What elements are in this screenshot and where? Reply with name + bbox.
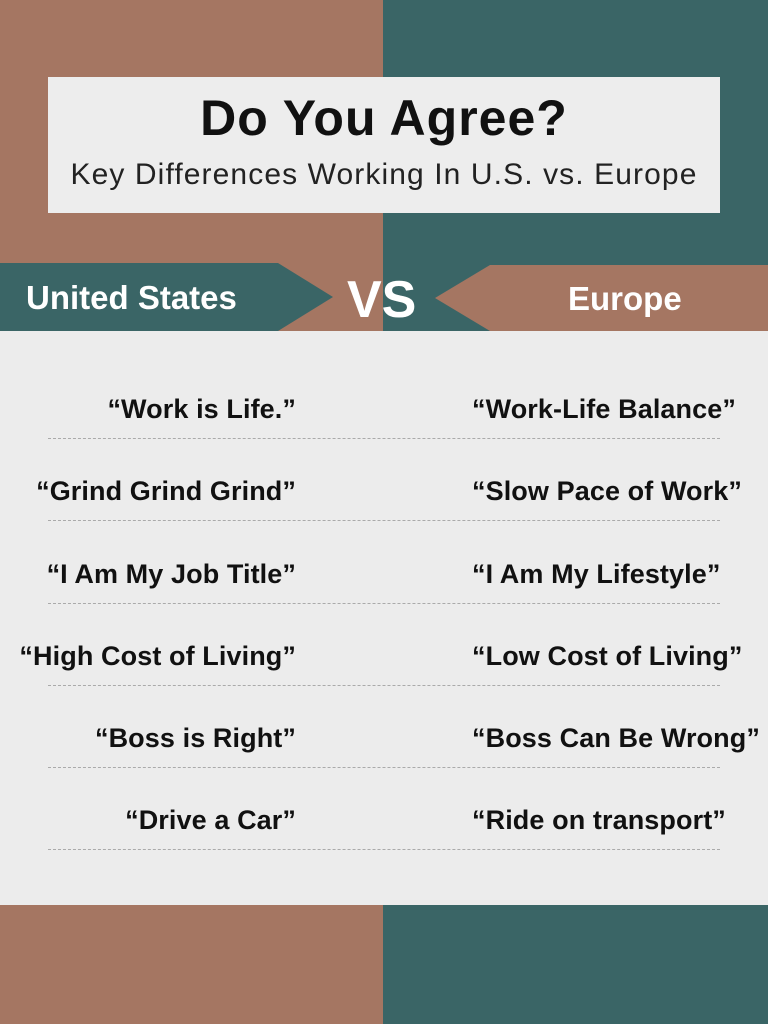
- comparison rows: “Work is Life.”: [107, 394, 296, 424]
- title box: [48, 77, 720, 213]
- comparison rows: [19, 394, 760, 850]
- comparison rows: “Boss is Right”: [95, 723, 296, 753]
- VS label: VS: [347, 271, 416, 329]
- comparison rows: “I Am My Lifestyle”: [472, 559, 720, 589]
- comparison rows: “Low Cost of Living”: [472, 641, 742, 671]
- comparison rows: “Ride on transport”: [472, 805, 726, 835]
- title: Do You Agree?: [200, 90, 568, 146]
- comparison rows: “Slow Pace of Work”: [472, 476, 742, 506]
- banner: Europe: Europe: [568, 280, 682, 317]
- banner: Europe: [435, 265, 768, 331]
- banner: United States: [0, 263, 333, 331]
- comparison rows: “I Am My Job Title”: [47, 559, 296, 589]
- comparison rows: “High Cost of Living”: [19, 641, 296, 671]
- banner: United States: United States: [26, 279, 237, 316]
- subtitle: Key Differences Working In U.S. vs. Europe: [70, 158, 698, 191]
- comparison rows: “Grind Grind Grind”: [36, 476, 296, 506]
- comparison rows: “Work-Life Balance”: [472, 394, 736, 424]
- comparison rows: “Drive a Car”: [125, 805, 296, 835]
- comparison rows: “Boss Can Be Wrong”: [472, 723, 760, 753]
